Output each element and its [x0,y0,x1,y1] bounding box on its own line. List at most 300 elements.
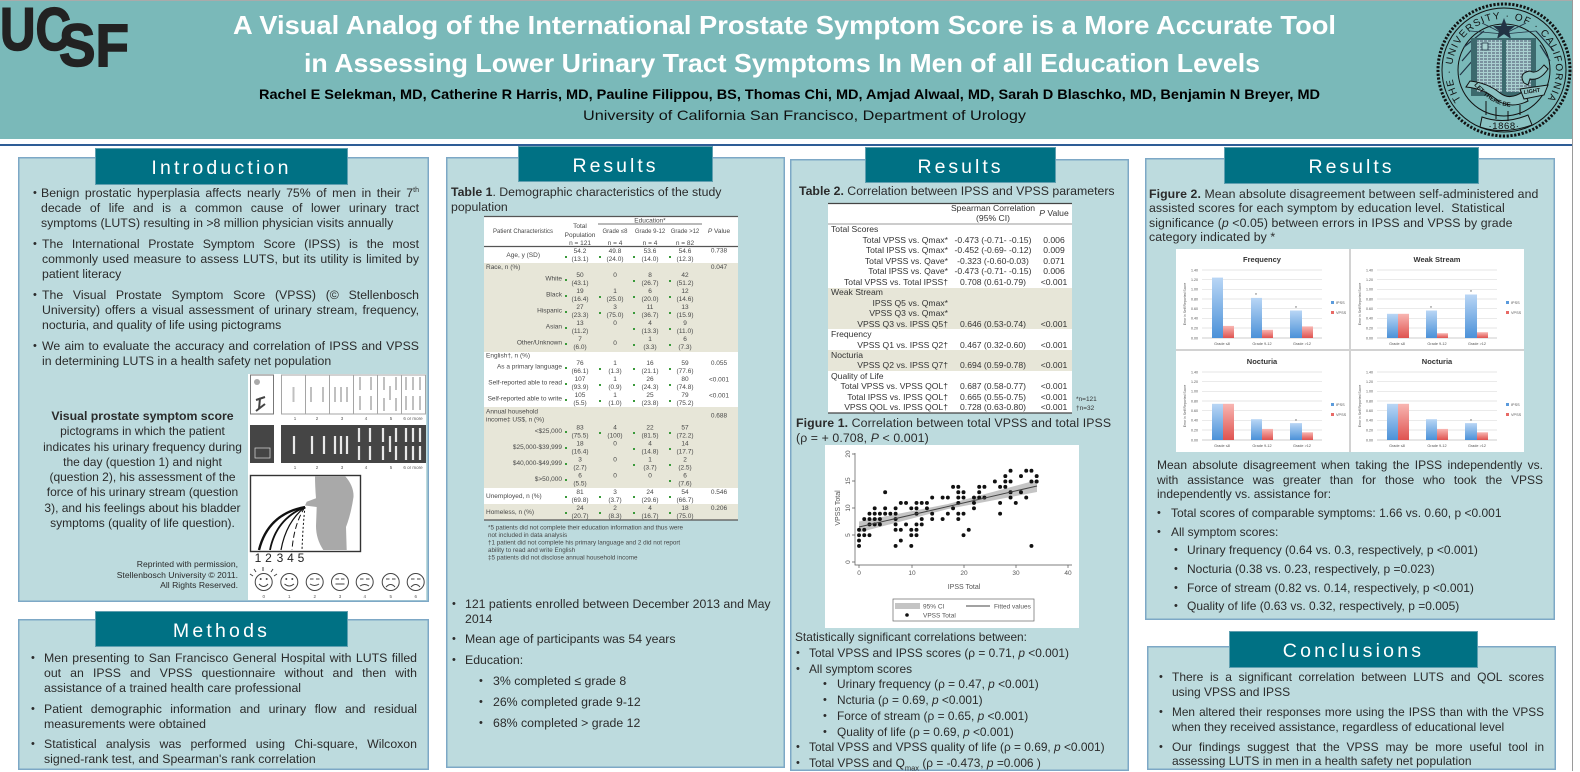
chart: frequency: * [1295,306,1297,312]
table 1: demographics: 54 [681,489,689,496]
heading: results [866,148,1055,182]
table 1: demographics: 4 [613,424,617,432]
text: VPSS description: 3), and his feelings about his bladder [44,501,241,515]
table 1: demographics: (1.3) [608,368,622,375]
pictogram figure: VPSS: 5 [390,465,393,470]
text: significant correlations: • [823,710,827,722]
text: reprint credit [117,559,238,590]
text: background bullet 1: symptoms (LUTS) resulting in >8 million physician visits annually [41,216,393,230]
table 2: correlations: (95% CI) [976,213,1010,223]
table 1: demographics: 1 [613,392,617,399]
table 1: demographics: (2.5) [678,464,692,472]
table 1: demographics: Grade >12 [671,229,700,235]
text: methods bullet 2: Patient demographic information and urinary flow and residual [44,702,417,716]
table 1: demographics: (3.3) [643,344,657,351]
table 2: correlations: †n=32 [1076,405,1095,412]
table 1: demographics: (25.0) [607,296,623,303]
table 1: demographics: (17.7) [677,448,693,456]
pictogram figure: VPSS: 3 [277,551,284,565]
table 1: demographics [484,216,738,562]
title and authors [233,10,1336,123]
text: significant correlations: • [796,662,800,674]
table 1: demographics: 2 [683,456,687,464]
scatter plot: VPSS vs IPSS: 5 [845,533,852,537]
table 1: demographics: (8.3) [608,513,622,520]
heading: conclusions: Conclusions [1283,640,1424,662]
table 1: demographics: (24.0) [607,256,623,263]
table 1: demographics: (81.5) [642,432,658,440]
table 2: correlations: 0.009 [1043,245,1065,255]
table 1: demographics: (16.4) [572,448,588,456]
table 1: demographics: 107 [575,376,586,383]
table 1: demographics: (66.7) [677,497,693,504]
table 1: demographics: 4 [648,505,652,512]
text: conclusion 3: assessing LUTS in men in a health safety net population [1172,754,1472,768]
table 1: demographics: 16 [646,360,654,367]
table 1: demographics: (11.2) [572,328,588,335]
table 1: demographics: 6 [683,472,687,480]
chart: frequency: Frequency [1243,255,1282,264]
table 1: demographics: (20.0) [642,296,658,303]
table 1: demographics: 3 [578,456,582,464]
table 1: demographics: 0.546 [711,489,728,496]
chart: nocturia left: VPSS [1336,413,1347,417]
chart: frequency: Grade ≤8 [1214,342,1230,346]
table 1: demographics: $40,000-$49,999 [513,460,562,467]
pictogram figure: VPSS: 6 or more [403,416,423,421]
table 1: demographics: (13.3) [642,328,658,335]
text: background bullet 1: • [33,187,37,199]
table 1: demographics: †1 patient did not complete his primary language and 2 did not report [488,540,680,546]
scatter plot: VPSS vs IPSS: VPSS Total [835,490,842,526]
chart: nocturia right: IPSS [1511,403,1520,407]
chart: nocturia right: Grade ≤8 [1389,444,1405,448]
text: background bullet 2: The International Prostate Symptom Score (IPSS) is the most [42,237,419,251]
table 2: correlations: <0.001 [1041,319,1067,329]
text: significant correlations: • [796,741,800,753]
chart: weak stream [1351,249,1524,349]
title and authors: University of California San Francisco, Department of Urology [583,107,1026,123]
text: reprint credit: All Rights Reserved. [160,580,238,590]
table 1: demographics: 83 [576,424,584,432]
text: quality of life: • [1174,600,1178,612]
table 1: demographics: Age, y (SD) [506,252,540,259]
text: conclusion 3: Our findings suggest that the VPSS may be more useful tool in [1172,740,1544,754]
chart: nocturia right: 0.60 [1366,409,1373,413]
table 1: demographics: (5.5) [573,400,587,407]
table 1: demographics: 1 [613,360,617,367]
university seal: ·1868· [1488,121,1520,132]
table 1: demographics: 0 [613,340,617,347]
table 1: demographics: (69.8) [572,497,588,504]
university seal: THE · UNIVERSITY · OF · CALIFORNIA [1446,12,1563,104]
table 1: demographics: (75.5) [572,432,588,440]
text: disagreement summary: independently vs. assistance for: [1157,487,1331,501]
table 1: demographics: 53.6 [644,248,657,255]
table 1: demographics: 0.055 [711,360,728,367]
table 1: demographics: (20.7) [572,513,588,520]
pictogram figure: VPSS: 1 [294,416,297,421]
chart: nocturia right: Nocturia [1422,357,1453,366]
table 2: correlations: <0.001 [1041,402,1067,412]
text: conclusion 2 [1160,705,1544,734]
table 2: correlations [828,202,1097,414]
text: background bullet 1: Benign prostatic hyperplasia affects nearly 75% of men in their 7th [41,186,419,200]
table 1: demographics: (14.6) [677,296,693,303]
panel: results correlation [790,147,1129,772]
chart: nocturia right: 0.00 [1366,438,1373,442]
scatter plot: VPSS vs IPSS: 20 [960,570,968,577]
table 1: demographics: 1 [648,336,652,343]
chart: nocturia left: Grade ≤8 [1214,444,1230,448]
chart: weak stream: Error in Self Reported Score [1358,283,1362,325]
table 1: demographics: (15.9) [677,312,693,319]
chart: nocturia right: 1.20 [1366,380,1373,384]
text: conclusion 1: There is a significant correlation between LUTS and QOL scores [1172,670,1544,684]
text: total scores: • [1157,507,1161,519]
chart: weak stream: * [1470,290,1472,296]
table 1: demographics: $>50,000 [535,476,562,483]
table 1: demographics: (26.7) [642,280,658,287]
table 1: demographics: 18 [681,505,689,512]
table 2: correlations: 0.467 (0.32-0.60) [960,340,1026,350]
chart: nocturia left [1176,351,1349,452]
table 1: demographics: (66.1) [572,368,588,375]
text: VPSS description [43,409,242,530]
table 1: demographics: (13.1) [572,256,588,263]
panel: results disagreement [1145,147,1555,620]
scatter plot: VPSS vs IPSS: 10 [845,504,852,512]
chart: nocturia left: Error in Self Reported Score [1183,385,1187,427]
table 1: demographics: (5.5) [573,480,587,488]
table 1 caption: population [451,200,508,214]
chart: nocturia right: Grade >12 [1468,444,1486,448]
table 2: correlations: -0.452 (-0.69- -0.12) [955,245,1032,255]
table 1: demographics: (16.4) [572,296,588,303]
figure 1 caption [796,416,1111,445]
chart: nocturia right: 0.20 [1366,428,1373,432]
text: significant correlations: Quality of life (ρ = 0.69, p <0.001) [837,724,1014,738]
text: reprint credit: Reprinted with permission, [137,559,238,569]
chart: frequency: 0.80 [1191,297,1198,301]
text: background bullet 4: in determining LUTS in a health safety net population [42,354,331,368]
table 1: demographics: ability to read and write English [488,547,576,554]
chart: weak stream: 1.00 [1366,288,1373,292]
text: force of stream: • [1174,582,1178,594]
pictogram figure: VPSS: 6 [414,594,417,599]
table 2: correlations: VPSS Q1 vs. IPSS Q2† [857,340,948,350]
chart: nocturia right: VPSS [1511,413,1522,417]
text: background bullet 2 [33,237,419,281]
text: urinary frequency: Urinary frequency (0.64 vs. 0.3, respectively, p <0.001) [1187,543,1478,557]
chart: nocturia right: 0.80 [1366,399,1373,403]
text: background bullet 2: commonly used measure to assess LUTS, but its utility is limited by [42,252,419,266]
chart: weak stream: * [1430,306,1432,312]
text: background bullet 3: nocturia, and quality of life using pictograms [42,318,281,332]
pictogram figure: VPSS: 3 [341,416,344,421]
table 2: correlations: Total IPSS vs. Qave* [868,266,949,276]
table 2: correlations: <0.001 [1041,392,1067,402]
table 1: demographics: 0 [613,456,617,464]
table 1: demographics: 4 [648,320,652,327]
pictogram figure: VPSS: 1 [288,594,291,599]
text: methods bullet 1: out an IPSS and VPSS questionnaire without and then with [44,666,417,680]
pictogram figure: VPSS: 3 [339,594,342,599]
table 1: demographics: 19 [576,288,584,295]
table 2: correlations: Total IPSS vs. IPSS QOL† [847,392,948,402]
text: conclusion 3: • [1159,741,1163,753]
chart: frequency: 1.00 [1191,288,1198,292]
table 1: demographics: 13 [576,320,584,327]
pictogram figure: VPSS: 5 [298,551,305,565]
panel: introduction [18,148,429,602]
text: methods bullet 2 [31,702,417,731]
table 1: demographics: (77.6) [677,368,693,375]
table 2: correlations: 0.006 [1043,235,1065,245]
scatter plot: VPSS vs IPSS: IPSS Total [948,584,981,591]
text: significant correlations: Total VPSS and VPSS quality of life (ρ = 0.69, p <0.001) [809,740,1105,754]
text: VPSS description: Visual prostate symptom score [51,409,234,423]
title and authors: A Visual Analog of the International Prostate Symptom Score is a More Accurate Tool [233,10,1336,40]
pictogram figure: VPSS: 4 [365,416,368,421]
text: significant correlations: • [796,757,800,769]
chart: nocturia left: 0.00 [1191,438,1198,442]
table 1: demographics: 0 [613,440,617,448]
table 1: demographics: 0.047 [711,264,728,271]
table 1: demographics: (51.2) [677,280,693,287]
text: education grade 8: • [479,675,483,687]
table 1: demographics: 26 [646,376,654,383]
table 1: demographics: income‡ US$, n (%) [486,416,544,424]
table 1: demographics: (74.8) [677,384,693,391]
table 1: demographics: n = 121 [569,240,591,247]
text: conclusion 3 [1160,740,1544,768]
table 2: correlations: VPSS Q2 vs. IPSS Q7† [857,360,948,370]
text: methods bullet 1 [31,651,417,695]
UCSF logo: SF [59,12,129,79]
table 2: correlations: Total Scores [831,224,878,234]
table 1: demographics: 0 [613,472,617,480]
university seal: LET THERE BE [1474,82,1510,107]
chart: nocturia right [1351,351,1524,452]
pictogram figure: VPSS: 2 [265,551,272,565]
text: conclusion 2: • [1159,706,1163,718]
table 2: correlations: VPSS Q3 vs. Qmax* [869,308,949,318]
text: significant correlations: • [823,678,827,690]
chart: frequency: Grade >12 [1293,342,1311,346]
table 2: correlations: 0.728 (0.63-0.80) [960,402,1026,412]
table 1: demographics: Asian [546,324,562,330]
table 1: demographics: 8 [648,272,652,279]
chart: weak stream: Grade 9-12 [1427,342,1447,346]
chart: frequency: Grade 9-12 [1252,342,1272,346]
text: background bullet 3: • [33,289,37,301]
text: all symptom scores: • [1157,526,1161,538]
chart: nocturia right: 1.00 [1366,390,1373,394]
heading: results: Results [572,155,659,177]
table 1: demographics: (72.2) [677,432,693,440]
chart: weak stream: 1.40 [1366,268,1373,272]
table 1: demographics: 0.738 [711,248,728,254]
table 1: demographics: Education* [634,218,666,224]
text: significant correlations: • [823,726,827,738]
university seal: LIGHT [1523,88,1541,96]
table 1: demographics: <0.001 [709,376,729,384]
text: methods bullet 3: Statistical analysis was performed using Chi-square, Wilcoxon [44,737,417,751]
table 1: demographics: White [545,276,562,282]
table 2: correlations: VPSS QOL vs. IPSS QOL† [844,402,948,412]
chart: frequency: IPSS [1336,301,1345,305]
university seal [1436,2,1572,138]
figure 2 caption: assisted scores for each symptom by education level. Statistical [1149,201,1505,215]
text: quality of life: Quality of life (0.63 vs. 0.32, respectively, p =0.005) [1187,599,1459,613]
table 1: demographics: 6 [578,472,582,480]
text: significant correlations: Statistically significant correlations between: [795,630,1027,644]
table 1: demographics: 0 [613,272,617,279]
chart: frequency: 0.00 [1191,336,1198,340]
table 1: demographics: 76 [576,360,584,367]
table 1: demographics: (21.1) [642,368,658,375]
table 1: demographics: (100) [607,432,623,440]
text: background bullet 2: patient literacy [42,267,121,281]
text: conclusion 1: using VPSS and IPSS [1172,685,1290,699]
text: significant correlations: Urinary frequency (ρ = 0.47, p <0.001) [837,677,1039,691]
table 1: demographics: <$25,000 [535,428,562,435]
scatter plot: VPSS vs IPSS: 95% CI [923,604,945,610]
scatter plot: VPSS vs IPSS: 10 [908,570,916,577]
table 1: demographics: Annual household [486,408,538,416]
table 2: correlations: 0.694 (0.59-0.78) [960,360,1026,370]
table 2: correlations: 0.006 [1043,266,1065,276]
table 2: correlations: 0.708 (0.61-0.79) [960,277,1026,287]
scatter plot: VPSS vs IPSS [825,445,1079,628]
chart: nocturia left: IPSS [1336,403,1345,407]
table 2: correlations: Nocturia [831,350,863,360]
table 1: demographics: (24.3) [642,384,658,391]
text: methods bullet 1: • [31,652,35,664]
title and authors: Rachel E Selekman, MD, Catherine R Harris, MD, Pauline Filippou, BS, Thomas Chi, MD, Amjad Alwaal, MD, Sarah D Blaschko, MD, Benjamin N Breyer, MD [259,86,1320,102]
chart: nocturia right: 0.40 [1366,419,1373,423]
text: education grade 9-12: • [479,696,483,708]
table 1: demographics: Black [546,292,563,298]
table 1: demographics: 1 [613,376,617,383]
text: total scores: Total scores of comparable symptoms: 1.66 vs. 0.60, p <0.001 [1171,506,1502,520]
table 1: demographics: 3 [613,304,617,311]
pictogram figure: VPSS: 1 [255,551,262,565]
scatter plot: VPSS vs IPSS: 0 [845,560,852,564]
table 1: demographics: (93.9) [572,384,588,391]
table 2: correlations: <0.001 [1041,381,1067,391]
text: background bullet 4: • [33,340,37,352]
table 1 caption [451,185,722,214]
chart: nocturia left: Grade >12 [1293,444,1311,448]
table 2: correlations: Total IPSS vs. Qmax* [866,245,949,255]
table 1: demographics: Grade ≤8 [603,229,628,235]
chart: nocturia left: 0.80 [1191,399,1198,403]
text: conclusion 2: Men altered their responses more using the IPSS than with the VPSS [1172,705,1544,719]
table 1: demographics: 11 [647,304,654,311]
table 1: demographics: 25 [646,392,654,399]
table 1: demographics: (3.7) [643,464,657,472]
text: VPSS description: force of his urinary stream (question [47,485,238,499]
table 1: demographics: 24 [646,489,654,496]
text: methods bullet 1: assistance of a trained health care professional [44,681,301,695]
chart: nocturia right: * [1470,419,1472,425]
table 2: correlations: 0.687 (0.58-0.77) [960,381,1026,391]
table 1: demographics: 6 [648,288,652,295]
header banner [0,0,1572,139]
table 2: correlations: VPSS Q3 vs. IPSS Q5† [857,319,948,329]
table 2: correlations: <0.001 [1041,360,1067,370]
text: background bullet 3: University) offers a visual assessment of urinary stream, frequency, [42,303,419,317]
table 1: demographics: Population [565,232,596,239]
text: nocturia: • [1174,563,1178,575]
text: conclusion 1 [1160,670,1544,700]
table 1: demographics: 22 [646,424,654,432]
table 1: demographics: (14.8) [642,448,658,456]
table 1: demographics: (1.0) [608,400,622,407]
text: conclusion 2: when they received assistance, regardless of educational level [1172,720,1504,734]
chart: frequency: 1.20 [1191,278,1198,282]
table 1: demographics: 0 [648,472,652,480]
table 1: demographics: 79 [681,392,689,399]
heading: introduction: Introduction [151,157,292,179]
table 1: demographics: (75.0) [607,312,623,319]
table 1: demographics: 54.6 [679,248,692,255]
table 2: correlations: P Value [1039,208,1069,218]
table 1: demographics: 49.8 [609,248,622,255]
table 1: demographics: Hispanic [537,308,563,314]
table 2: correlations: -0.473 (-0.71- -0.15) [955,235,1032,245]
pictogram figure: VPSS: 2 [316,465,319,470]
chart: nocturia left: 0.40 [1191,419,1198,423]
chart: weak stream: 0.20 [1366,326,1373,330]
figure 2 caption: category indicated by * [1149,230,1275,244]
chart: nocturia left: 0.60 [1191,409,1198,413]
panel: results demographics [446,146,785,768]
text: VPSS description: indicates his urinary frequency during [43,440,242,454]
text: reprint credit: Stellenbosch University © 2011. [117,570,238,580]
scatter plot: VPSS vs IPSS: 0 [857,570,861,577]
table 1: demographics: n = 82 [676,240,695,247]
chart: frequency [1176,249,1349,349]
text: methods bullet 3: signed-rank test, and Spearman's rank correlation [44,752,316,766]
table 2: correlations: Total VPSS vs. Total IPSS† [844,277,948,287]
table 1: demographics: 105 [575,392,586,399]
chart: weak stream: Weak Stream [1414,255,1461,264]
table 1: demographics: 0.206 [711,505,728,512]
table 1: demographics: (23.3) [572,312,588,319]
chart: nocturia left: 0.20 [1191,428,1198,432]
pictogram figure: VPSS: 4 [363,594,366,599]
table 1: demographics: $25,000-$39,999 [513,444,562,451]
table 1: demographics: (23.8) [642,400,658,407]
page right edge line [1572,0,1573,771]
pictogram figure: VPSS: 4 [365,465,368,470]
table 1: demographics: (29.6) [642,497,658,504]
chart: weak stream: IPSS [1511,301,1520,305]
text: significant correlations: • [796,647,800,659]
chart: nocturia left: * [1295,419,1297,425]
table 2: correlations: <0.001 [1041,340,1067,350]
table 1: demographics: 0 [613,320,617,327]
table 1: demographics: *5 patients did not complete their education information and thus were [488,524,683,532]
table 1: demographics: (7.6) [678,480,692,488]
panel: methods [18,611,429,770]
text: significant correlations: Force of stream (ρ = 0.65, p <0.001) [837,709,1028,723]
table 1: demographics: 14 [681,440,689,448]
chart: weak stream: 0.60 [1366,307,1373,311]
